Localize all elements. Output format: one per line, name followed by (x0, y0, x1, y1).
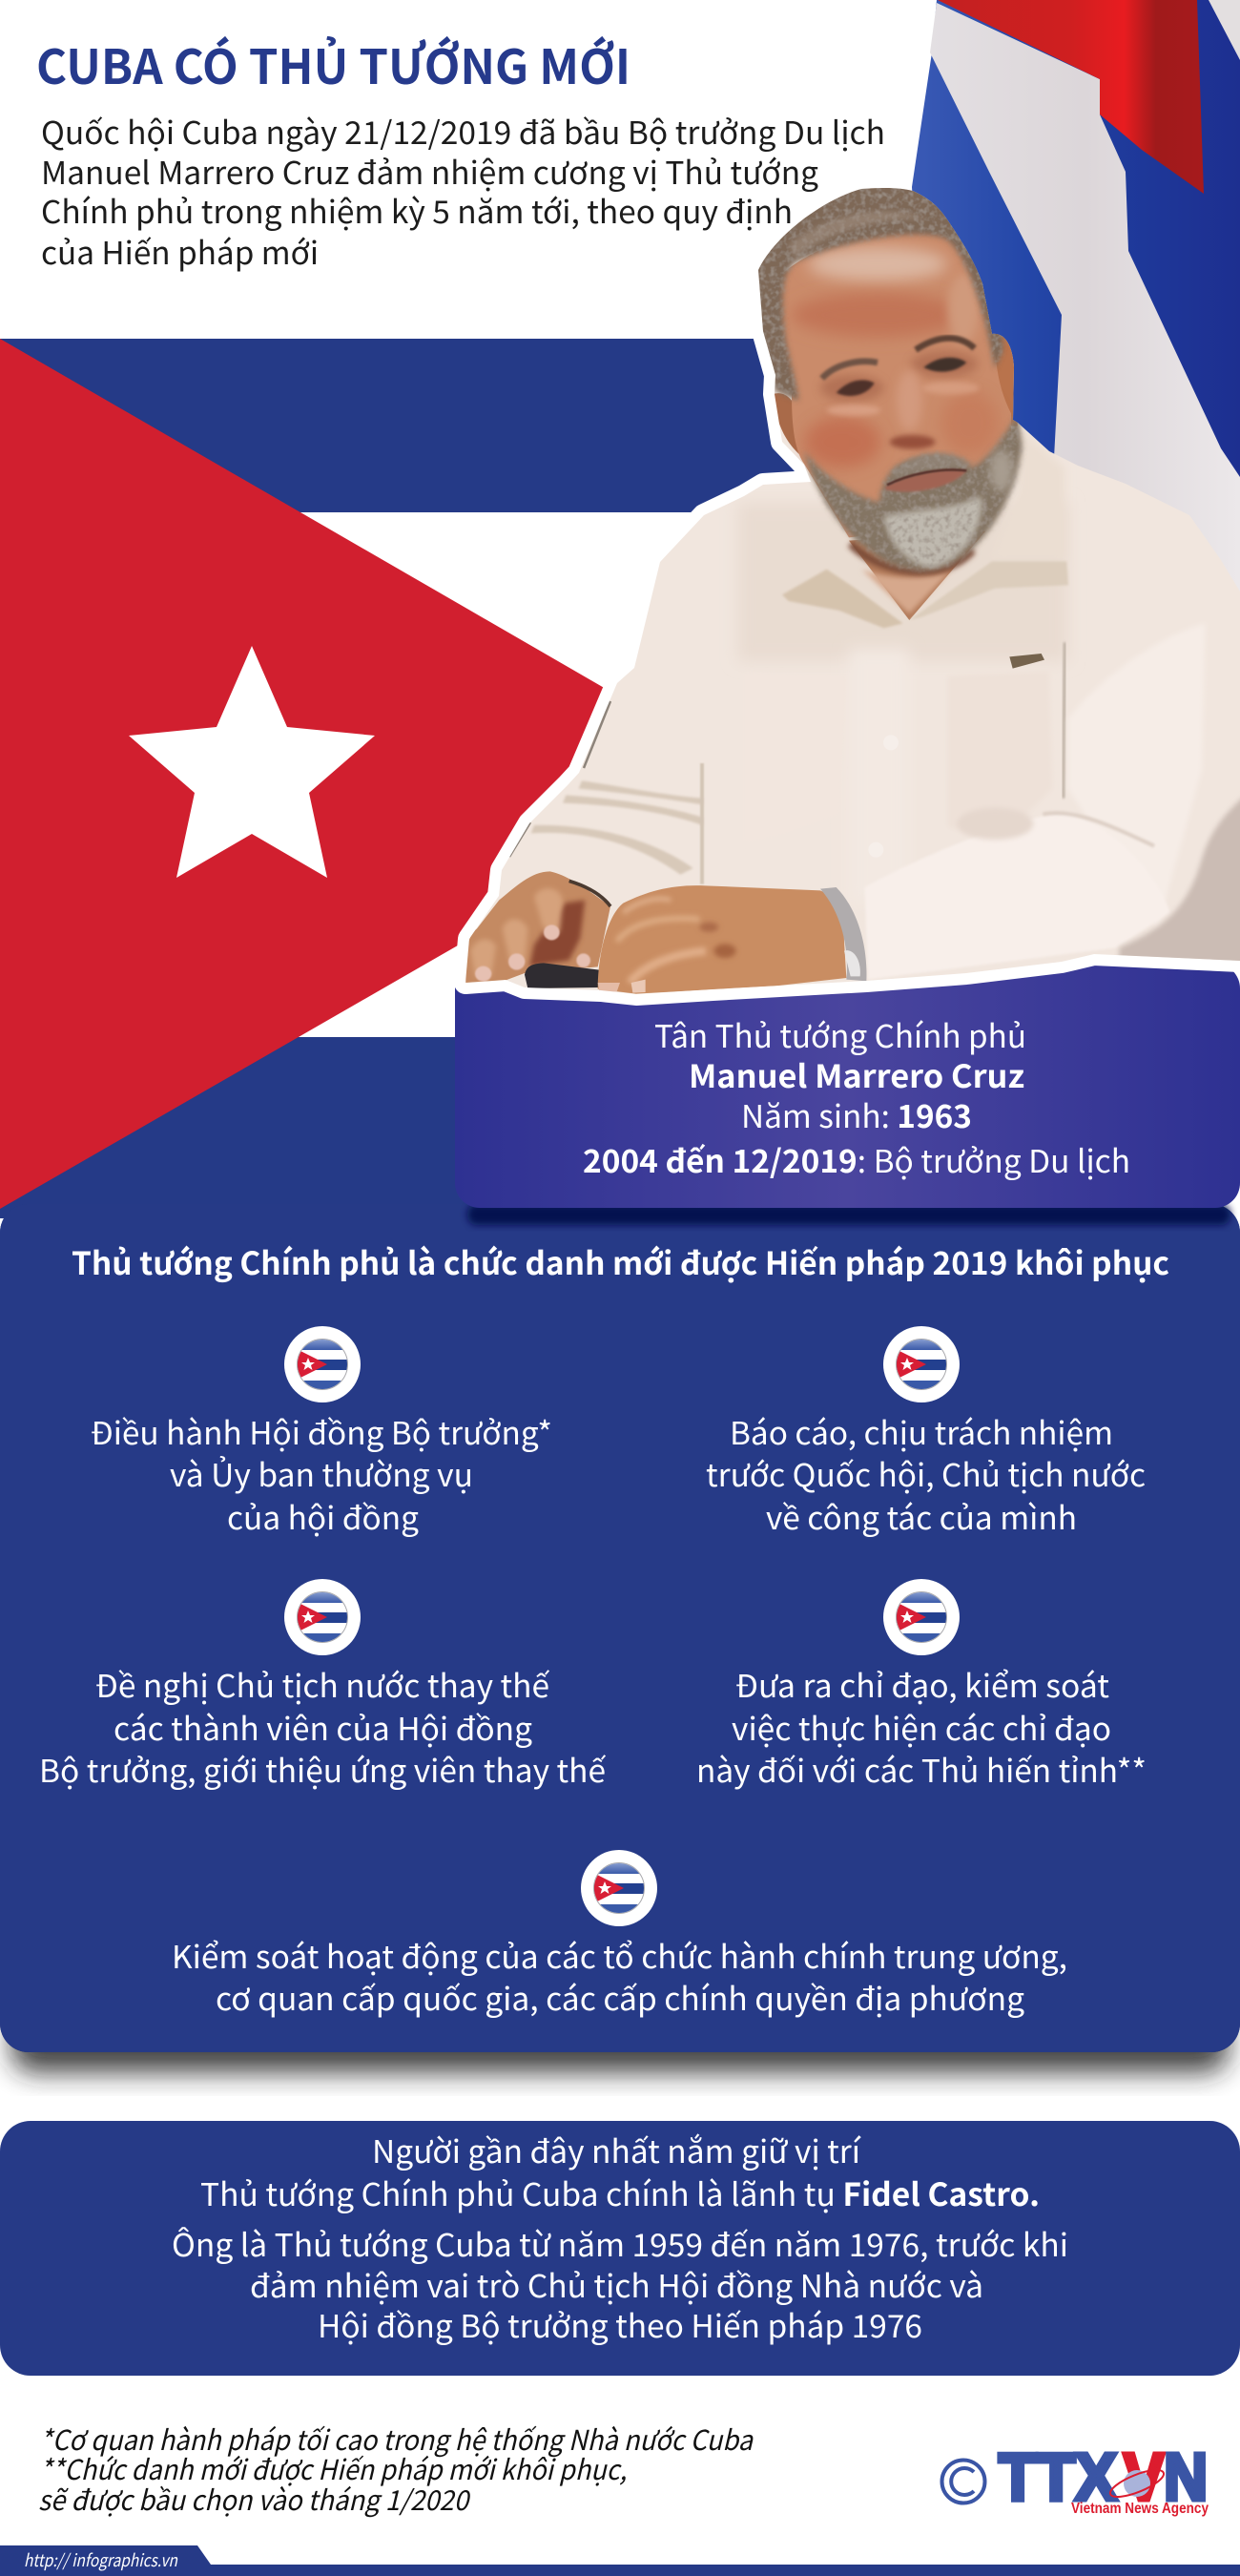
right hand shading (617, 899, 736, 983)
agency letters (999, 2440, 1208, 2514)
collar (782, 570, 903, 628)
caption text: 2004 đến 12/2019: Bộ trưởng Du lịch (583, 1136, 1130, 1182)
icon: flag 2 (883, 1326, 960, 1402)
duty 2: trước Quốc hội, Chủ tịch nước (706, 1450, 1146, 1496)
sleeve folds (531, 780, 703, 875)
duty 4: Đưa ra chỉ đạo, kiểm soát (735, 1661, 1109, 1707)
upper arm light (1071, 628, 1202, 893)
duty 5 (172, 1932, 1067, 2020)
forehead light (808, 246, 947, 281)
globe (1107, 2464, 1167, 2503)
caption text: Tân Thủ tướng Chính phủ (654, 1011, 1026, 1057)
finger lights (470, 888, 563, 976)
caption panel: new Prime Minister (455, 964, 1240, 1208)
right hand (598, 885, 846, 994)
portrait white cut-out outline (465, 188, 1240, 994)
shirt (448, 181, 1240, 1002)
duty 4 (696, 1661, 1147, 1792)
agency letters: VN (1124, 2440, 1208, 2514)
footnotes (38, 2419, 754, 2519)
note text: Ông là Thủ tướng Cuba từ năm 1959 đến năm 1976, trước khi (172, 2220, 1068, 2266)
logo: TTXVN (942, 2440, 1209, 2517)
caption text: Năm sinh: 1963 (741, 1091, 972, 1137)
watch (820, 887, 866, 981)
torso edge (700, 763, 704, 884)
duty 2: Báo cáo, chịu trách nhiệm (730, 1408, 1113, 1454)
duty 5: cơ quan cấp quốc gia, các cấp chính quyền địa phương (216, 1974, 1024, 2020)
flag star (129, 646, 375, 878)
placket light (853, 649, 904, 666)
hands, drawn in zoomed coordinates (465, 763, 866, 994)
panel shadow (11, 2013, 1229, 2072)
duty 4: này đối với các Thủ hiến tỉnh** (696, 1746, 1147, 1792)
duty 5: Kiểm soát hoạt động của các tổ chức hành chính trung ương, (172, 1932, 1067, 1978)
lips (885, 469, 966, 491)
footer url: http:// infographics.vn (24, 2547, 178, 2572)
duty 3: Bộ trưởng, giới thiệu ứng viên thay thế (39, 1746, 607, 1792)
duty 1: Điều hành Hội đồng Bộ trưởng* (91, 1408, 552, 1454)
agency letters: TTX (999, 2440, 1117, 2514)
chest shade above pockets (737, 503, 1068, 661)
icon: flag 1 (284, 1326, 361, 1402)
footnotes: *Cơ quan hành pháp tối cao trong hệ thống Nhà nước Cuba (40, 2419, 754, 2459)
panel: Fidel Castro note (0, 2121, 1240, 2376)
buttons (883, 735, 899, 750)
note text (172, 2127, 1068, 2347)
under-eye light (827, 405, 880, 416)
left hand (465, 871, 610, 983)
icon: flag 5 (581, 1850, 657, 1926)
intro paragraph: Chính phủ trong nhiệm kỳ 5 năm tới, theo quy định (41, 187, 793, 233)
duty 3: Đề nghị Chủ tịch nước thay thế (95, 1661, 550, 1707)
icon: flag 4 (883, 1579, 960, 1655)
temple (947, 274, 980, 343)
eye sockets (820, 375, 884, 402)
neck shadow under beard (851, 544, 973, 571)
forehead red (792, 293, 963, 337)
cheeks (804, 417, 880, 467)
pockets (744, 673, 846, 842)
photo: Cuban flag behind the Prime Minister (912, 0, 1240, 630)
caption text (583, 1011, 1130, 1182)
duty 2: về công tác của mình (766, 1493, 1077, 1539)
duty 1: và Ủy ban thường vụ (170, 1450, 473, 1496)
flag background: blue top band (0, 339, 954, 512)
intro paragraph: Quốc hội Cuba ngày 21/12/2019 đã bầu Bộ trưởng Du lịch (41, 108, 885, 154)
face base (778, 230, 1011, 537)
note text: Hội đồng Bộ trưởng theo Hiến pháp 1976 (318, 2301, 922, 2347)
shadow between fingers (529, 900, 585, 966)
hair light (789, 211, 928, 258)
beard side grey (990, 450, 1013, 491)
duty 1 (91, 1408, 552, 1539)
beard light chin (884, 496, 982, 568)
heading: Thủ tướng Chính phủ là chức danh mới được Hiến pháp 2019 khôi phục (72, 1238, 1169, 1284)
note text: Thủ tướng Chính phủ Cuba chính là lãnh tụ Fidel Castro. (200, 2170, 1040, 2215)
duty 2 (706, 1408, 1146, 1539)
shoulder shading near neck (1019, 427, 1063, 499)
note text: đảm nhiệm vai trò Chủ tịch Hội đồng Nhà nước và (250, 2261, 983, 2307)
mouse (525, 963, 599, 988)
footnotes: sẽ được bầu chọn vào tháng 1/2020 (38, 2479, 471, 2519)
duty 4: việc thực hiện các chỉ đạo (732, 1704, 1111, 1750)
nose (897, 370, 922, 431)
left sleeve edge dark lines (509, 701, 610, 857)
icon: flag 3 (284, 1579, 361, 1655)
forearm light (865, 814, 1170, 980)
sleeve seam (1063, 642, 1065, 799)
caption panel shadow (467, 1204, 1230, 1225)
eyes (837, 380, 875, 396)
intro paragraph (41, 108, 885, 274)
head and neck, drawn in zoomed coordinates (751, 179, 1068, 628)
note text: Người gần đây nhất nắm giữ vị trí (372, 2127, 861, 2172)
eyebrows (822, 362, 878, 379)
intro paragraph: của Hiến pháp mới (41, 228, 319, 274)
pen in pocket (1009, 654, 1044, 669)
intro paragraph: Manuel Marrero Cruz đảm nhiệm cương vị Thủ tướng (41, 148, 818, 194)
hair (751, 179, 1003, 401)
right ear (992, 332, 1018, 426)
shirt details, drawn in zoomed coordinates (737, 503, 1240, 980)
left cuff line (569, 881, 610, 906)
beard (804, 413, 1023, 571)
duty 1: của hội đồng (227, 1493, 419, 1539)
portrait: Manuel Marrero Cruz (448, 179, 1240, 1002)
rear dark sleeve (1119, 789, 1240, 966)
mustache (894, 453, 973, 479)
flag background: red triangle (0, 339, 754, 1209)
neck (849, 531, 985, 620)
nails (475, 924, 590, 982)
caption text: Manuel Marrero Cruz (689, 1051, 1024, 1097)
fingertips (598, 983, 620, 991)
footer bar (0, 2545, 1240, 2576)
fold shadows (1043, 813, 1154, 846)
duty 3: các thành viên của Hội đồng (114, 1704, 532, 1750)
flag background: blue lower band (0, 1037, 954, 1218)
agency tagline: Vietnam News Agency (1071, 2501, 1209, 2517)
footnotes: **Chức danh mới được Hiến pháp mới khôi phục, (40, 2448, 627, 2488)
title: CUBA CÓ THỦ TƯỚNG MỚI (36, 30, 630, 98)
left ear (775, 393, 799, 454)
panel: duties of the Prime Minister (0, 1204, 1240, 2072)
copyright mark (942, 2460, 984, 2503)
panel face (0, 1204, 1240, 2052)
duty 3 (39, 1661, 607, 1792)
